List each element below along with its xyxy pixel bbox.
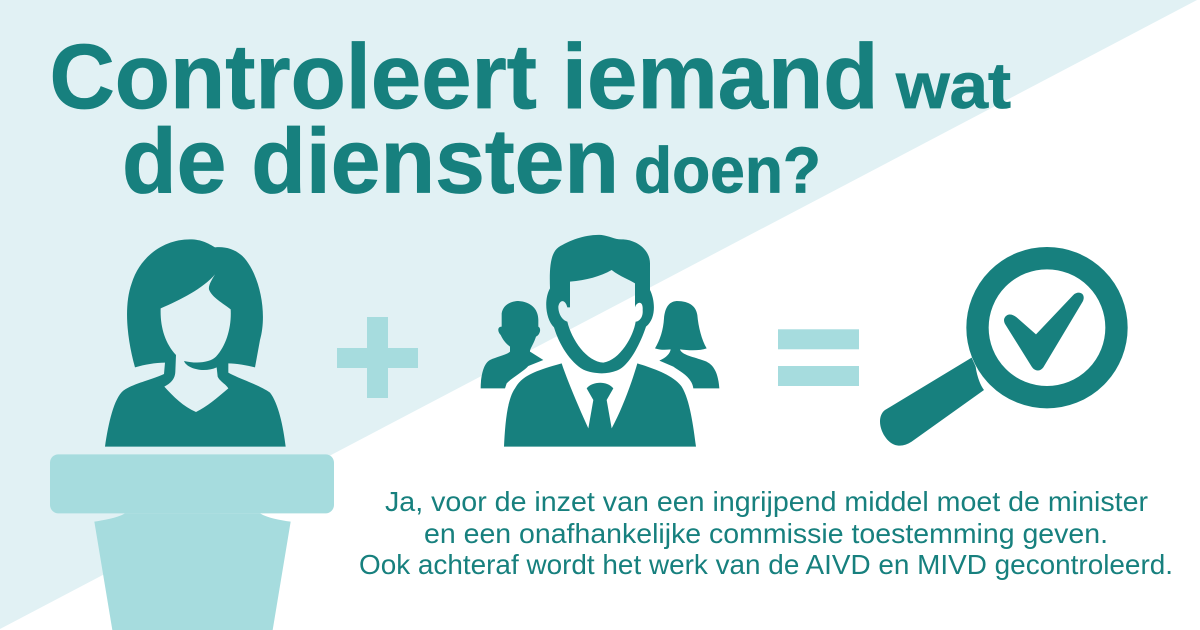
icon: woman at podium — [105, 239, 286, 447]
icon: plus sign — [337, 317, 418, 398]
right person — [655, 301, 719, 388]
explanatory text: Ook achteraf wordt het werk van de AIVD en MIVD gecontroleerd. — [359, 549, 1173, 580]
title: Controleert iemand — [50, 26, 878, 128]
explanatory text: en een onafhankelijke commissie toestemming geven. — [424, 518, 1108, 549]
centre man head — [546, 235, 654, 373]
centre man suit — [504, 363, 696, 447]
icon: podium — [50, 454, 334, 630]
title: wat — [895, 49, 1011, 122]
title — [50, 26, 1011, 212]
icon: equals sign — [778, 329, 859, 386]
explanatory text: Ja, voor de inzet van een ingrijpend middel moet de minister — [385, 486, 1148, 517]
icon: magnifier with check mark — [880, 258, 1116, 446]
title: de diensten — [122, 110, 619, 212]
title: doen? — [634, 134, 821, 206]
left person — [481, 301, 543, 388]
icon: group of people — [481, 235, 719, 447]
explanatory text — [359, 486, 1173, 580]
